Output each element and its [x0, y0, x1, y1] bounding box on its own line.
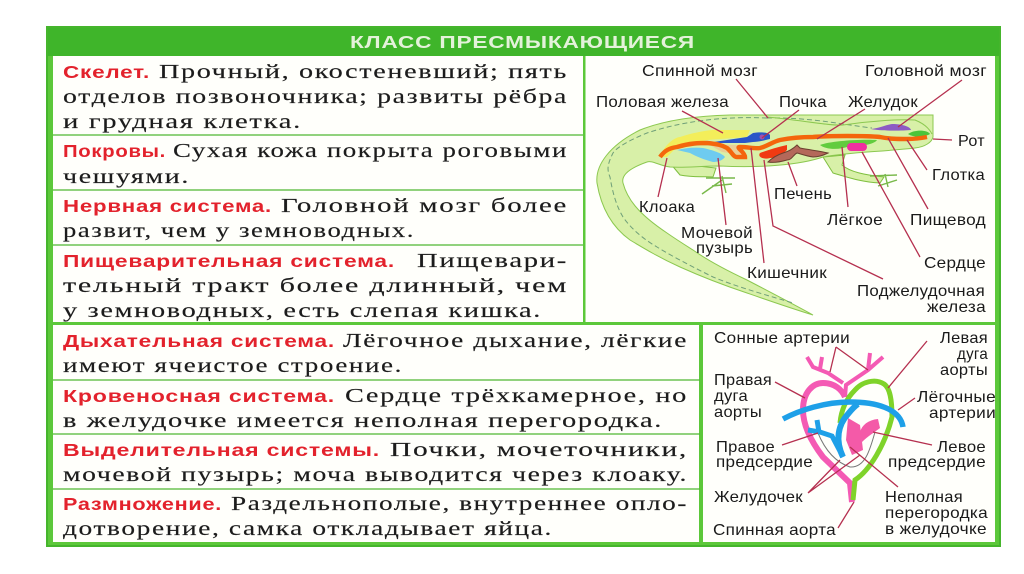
circulatory labels	[713, 330, 996, 539]
organ labels	[596, 63, 987, 316]
text block: дыхательная система: имеют ячеистое строение.	[63, 355, 403, 377]
text block: дыхательная система: Лёгочное дыхание, лёгкие	[343, 330, 688, 352]
text block: пищеварительная система: Пищеварительная система.	[63, 251, 395, 271]
text block: кровеносная система	[63, 385, 688, 432]
title: КЛАСС ПРЕСМЫКАЮЩИЕСЯ	[350, 32, 695, 52]
organ labels: железа	[927, 299, 986, 316]
organ labels: Глотка	[932, 167, 985, 184]
circulatory labels: предсердие	[888, 454, 986, 471]
text block: кровеносная система: Сердце трёхкамерное, но	[345, 385, 688, 407]
text block: нервная система: Нервная система.	[63, 196, 272, 216]
text block: пищеварительная система: у земноводных, есть слепая кишка.	[63, 300, 542, 322]
text block: нервная система	[63, 195, 568, 242]
organ labels: Спинной мозг	[642, 63, 758, 80]
panel: circulatory system diagram	[713, 330, 996, 539]
circulatory labels: Левое	[937, 439, 986, 456]
text block: скелет: Скелет.	[63, 62, 150, 82]
text block: размножение	[63, 493, 688, 540]
circulatory labels: Сонные артерии	[714, 330, 850, 347]
circulatory labels: перегородка	[885, 505, 988, 522]
text block: выделительная система	[63, 439, 688, 486]
circulatory labels: дуга	[714, 388, 748, 405]
organ labels: Пищевод	[910, 212, 986, 229]
text block: скелет: Прочный, окостеневший; пять	[159, 61, 568, 83]
text block: размножение: Раздельнополые, внутреннее опло-	[231, 493, 688, 515]
text block: нервная система: развит, чем у земноводных.	[63, 220, 415, 242]
text block: скелет: и грудная клетка.	[63, 111, 302, 133]
text block: кровеносная система: Кровеносная система.	[63, 386, 335, 406]
pointer lines	[775, 341, 932, 528]
circulatory labels: Желудочек	[714, 489, 804, 506]
organ labels: пузырь	[696, 240, 753, 257]
organ labels: Лёгкое	[827, 212, 883, 229]
pointer lines	[658, 79, 962, 279]
circulatory labels: Лёгочные	[917, 389, 996, 406]
text block: выделительная система: Почки, мочеточники,	[390, 439, 688, 461]
organ labels: Желудок	[848, 94, 919, 111]
text block: скелет	[63, 61, 568, 133]
text block: покровы: чешуями.	[63, 166, 190, 188]
organ labels: Мочевой	[681, 225, 753, 242]
text block: нервная система: Головной мозг более	[281, 195, 568, 217]
organ labels: Почка	[779, 94, 827, 111]
organ labels: Головной мозг	[865, 63, 987, 80]
organ labels: Сердце	[924, 255, 986, 272]
text block: пищеварительная система: Пищевари-	[417, 250, 568, 272]
circulatory labels: Спинная аорта	[713, 522, 836, 539]
organ labels: Клоака	[639, 199, 695, 216]
circulatory labels: артерии	[929, 405, 996, 422]
text block: выделительная система: Выделительная системы.	[63, 440, 380, 460]
circulatory labels: в желудочке	[885, 521, 987, 538]
aorta arches	[783, 353, 903, 502]
text block: дыхательная система	[63, 330, 688, 377]
text block: размножение: дотворение, самка откладывает яйца.	[63, 518, 553, 540]
text block: покровы: Покровы.	[63, 141, 166, 161]
text block: пищеварительная система: тельный тракт более длинный, чем	[63, 275, 568, 297]
text block: пищеварительная система	[63, 250, 568, 322]
lizard body	[597, 115, 933, 315]
organ labels: Половая железа	[596, 94, 729, 111]
text block: покровы	[63, 140, 568, 188]
organ labels: Кишечник	[747, 265, 828, 282]
text block: дыхательная система: Дыхательная система.	[63, 331, 335, 351]
text block: скелет: отделов позвоночника; развиты рёбра	[63, 86, 568, 108]
organ labels: Поджелудочная	[857, 283, 985, 300]
heart chambers	[846, 418, 880, 455]
circulatory labels: Левая	[940, 330, 988, 347]
circulatory labels: аорты	[714, 404, 762, 421]
text block: кровеносная система: в желудочке имеется неполная перегородка.	[63, 410, 663, 432]
text block: покровы: Сухая кожа покрыта роговыми	[173, 140, 568, 162]
circulatory labels: предсердие	[716, 454, 813, 471]
circulatory labels: Правое	[716, 439, 775, 456]
organs	[660, 124, 930, 162]
circulatory labels: Правая	[714, 372, 772, 389]
organ labels: Печень	[774, 186, 832, 203]
text block: размножение: Размножение.	[63, 494, 222, 514]
organ labels: Рот	[958, 133, 985, 150]
panel: lizard anatomy diagram	[596, 63, 987, 316]
circulatory labels: дуга	[957, 346, 988, 363]
text block: выделительная система: мочевой пузырь; моча выводится через клоаку.	[63, 464, 688, 486]
circulatory labels: Неполная	[885, 489, 963, 506]
heart outline	[818, 432, 875, 467]
circulatory labels: аорты	[940, 362, 988, 379]
